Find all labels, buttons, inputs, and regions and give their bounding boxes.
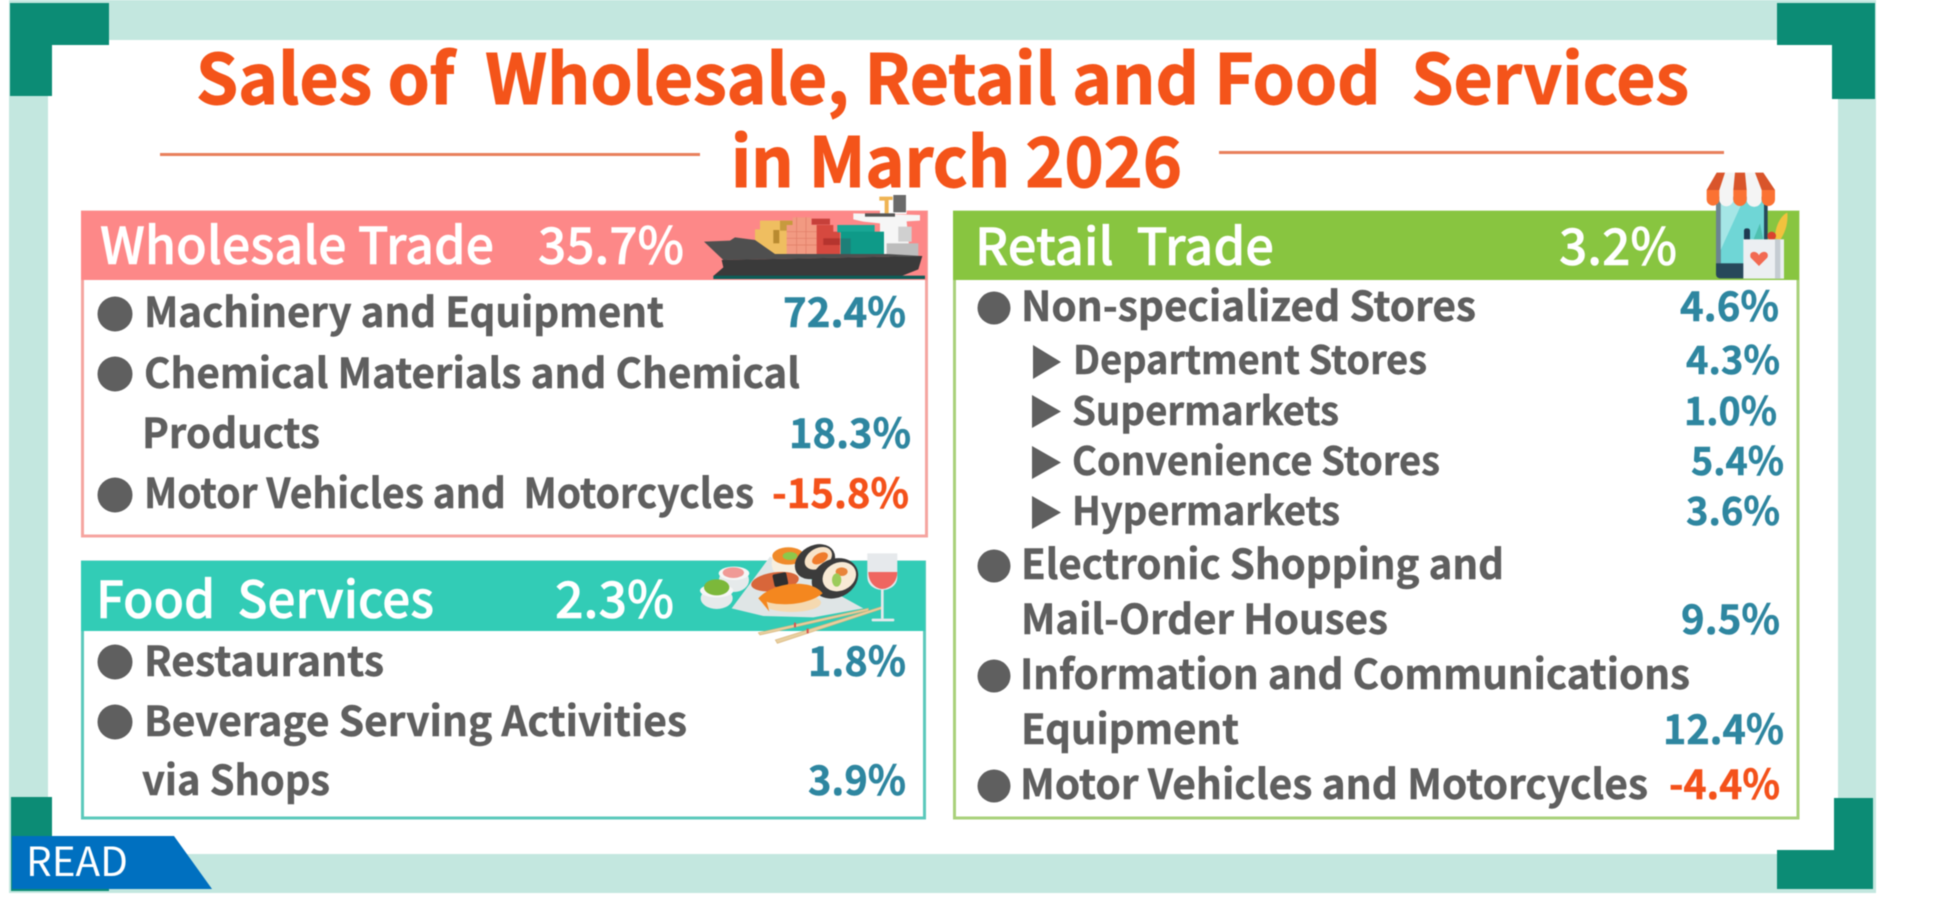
- row: chemical materials: 18.3%: [789, 400, 911, 460]
- sub-row: department stores: [1033, 330, 1780, 386]
- title rule: left: [160, 153, 700, 156]
- corner bracket: bottom left: [11, 797, 109, 891]
- row: chemical materials: Products: [142, 400, 320, 460]
- food heading: Food Services: [96, 559, 434, 633]
- row: information and communications: [978, 641, 1784, 756]
- row: restaurants: 1.8%: [808, 628, 906, 688]
- row: restaurants: [98, 628, 906, 688]
- row: motor vehicles and motorcycles: Motor Vehicles and Motorcycles: [144, 460, 754, 520]
- row: restaurants: Restaurants: [144, 628, 384, 688]
- row: motor vehicles and motorcycles: -15.8%: [772, 460, 909, 520]
- food total: 2.3%: [555, 559, 674, 633]
- row: information and communications: Equipment: [1021, 696, 1239, 756]
- row: electronic shopping: Electronic Shopping and: [1021, 531, 1504, 591]
- title: [196, 24, 1689, 207]
- icon: sushi plate and wine: [700, 537, 897, 643]
- sub-row: convenience stores: [1032, 431, 1784, 487]
- row: machinery and equipment: Machinery and Equipment: [144, 279, 664, 339]
- sub-row: department stores: Department Stores: [1073, 330, 1427, 386]
- panel: wholesale trade: [81, 194, 927, 536]
- row: non-specialized stores: [978, 273, 1779, 333]
- sub-row: convenience stores: Convenience Stores: [1072, 431, 1440, 487]
- retail header band: [953, 211, 1799, 280]
- wholesale total: 35.7%: [538, 205, 684, 279]
- row: information and communications: Information and Communications: [1020, 641, 1690, 701]
- sub-row: supermarkets: Supermarkets: [1072, 381, 1339, 437]
- food header band: [81, 561, 925, 631]
- sub-row: hypermarkets: Hypermarkets: [1072, 481, 1340, 537]
- sub-row: hypermarkets: [1032, 481, 1780, 537]
- icon: phone storefront with shopping bag: [1707, 173, 1788, 279]
- READ tag: READ: [26, 830, 128, 888]
- row: electronic shopping: [978, 531, 1780, 646]
- corner bracket: top left: [10, 3, 109, 96]
- title: Sales of Wholesale, Retail and Food Services: [196, 24, 1689, 124]
- panel: food services: [81, 537, 925, 818]
- wholesale header band: [81, 211, 927, 280]
- retail total: 3.2%: [1559, 206, 1677, 280]
- row: chemical materials: [98, 340, 911, 460]
- sub-row: supermarkets: [1032, 381, 1777, 437]
- retail heading: Retail Trade: [975, 206, 1274, 280]
- wholesale heading: Wholesale Trade: [100, 205, 494, 279]
- row: machinery and equipment: [98, 279, 906, 339]
- row: beverage serving activities: [98, 688, 906, 807]
- title: in March 2026: [731, 107, 1182, 207]
- row: non-specialized stores: Non-specialized Stores: [1021, 273, 1476, 333]
- sub-row: supermarkets: 1.0%: [1684, 381, 1777, 437]
- row: electronic shopping: 9.5%: [1681, 586, 1780, 646]
- row: beverage serving activities: Beverage Serving Activities: [144, 688, 687, 748]
- row: motor vehicles and motorcycles: Motor Vehicles and Motorcycles: [1020, 751, 1648, 811]
- sub-row: convenience stores: 5.4%: [1691, 431, 1784, 487]
- row: machinery and equipment: 72.4%: [783, 279, 906, 339]
- row: information and communications: 12.4%: [1663, 696, 1784, 756]
- sub-row: department stores: 4.3%: [1686, 330, 1780, 386]
- row: beverage serving activities: via Shops: [142, 747, 330, 807]
- corner bracket: bottom right: [1777, 798, 1873, 889]
- sub-row: hypermarkets: 3.6%: [1686, 481, 1780, 537]
- row: motor vehicles and motorcycles: -4.4%: [1669, 751, 1780, 811]
- icon: container ship: [704, 194, 925, 279]
- row: non-specialized stores: 4.6%: [1680, 273, 1779, 333]
- title rule: right: [1219, 151, 1724, 154]
- row: electronic shopping: Mail-Order Houses: [1021, 586, 1388, 646]
- panel: retail trade: [953, 173, 1799, 818]
- row: chemical materials: Chemical Materials and Chemical: [144, 340, 800, 400]
- READ tag: [12, 830, 212, 889]
- corner bracket: top right: [1777, 3, 1875, 99]
- row: beverage serving activities: 3.9%: [808, 747, 906, 807]
